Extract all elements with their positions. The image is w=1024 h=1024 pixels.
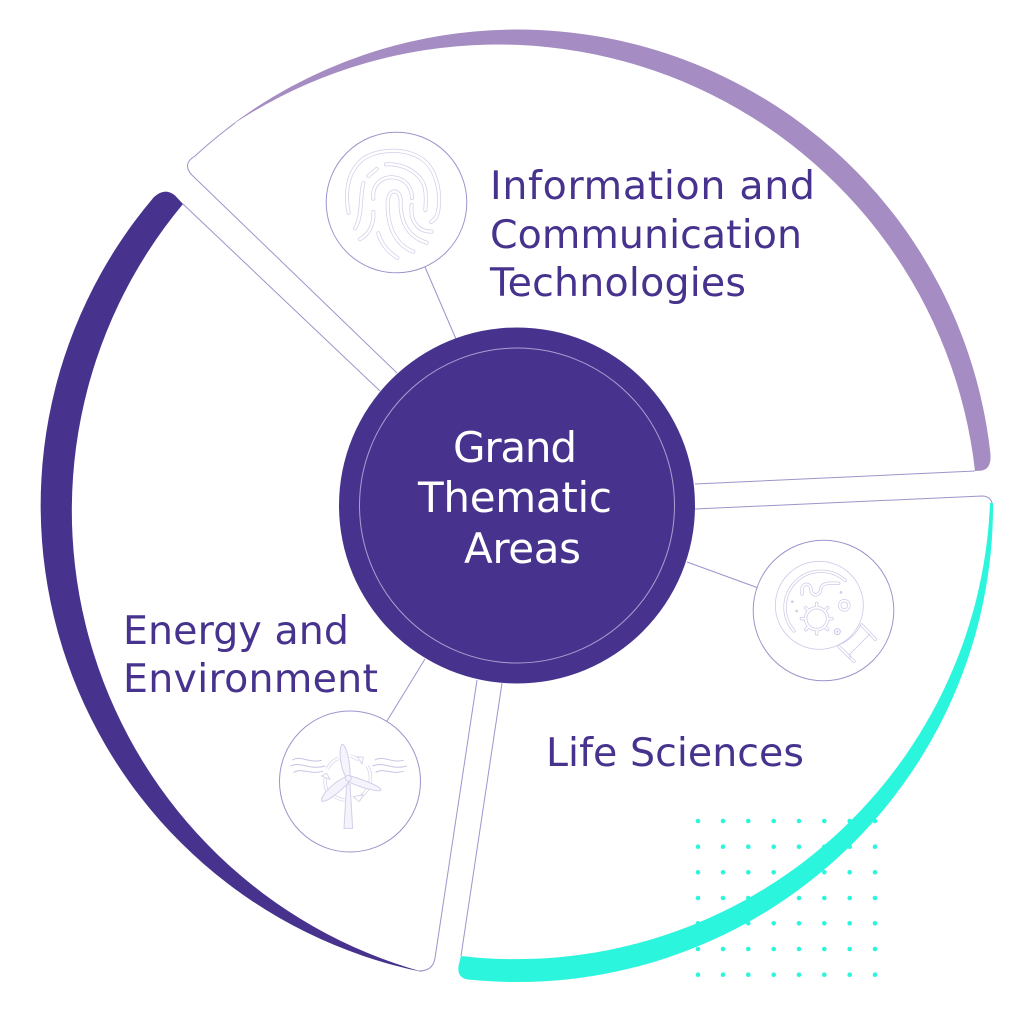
hub title: Grand — [453, 423, 577, 472]
accent arc: light purple — [226, 29, 991, 471]
panel outline: ICT — [188, 123, 975, 484]
panel outline: energy and environment — [183, 204, 477, 971]
label: information and communication technologies: Technologies — [489, 260, 746, 306]
panel: information and communication technologies — [188, 29, 991, 484]
panel: life sciences — [458, 496, 993, 982]
icon: wind turbine — [280, 711, 420, 852]
central hub: grand thematic areas — [339, 328, 695, 684]
label: energy and environment: Energy and — [123, 608, 349, 654]
hub title: Thematic — [417, 473, 612, 522]
connector: life sciences icon to hub — [687, 562, 757, 588]
icon: microbes in petri dish — [753, 540, 894, 681]
hub title: Areas — [464, 524, 581, 573]
accent arc: dark purple — [41, 192, 423, 972]
label: energy and environment: Environment — [123, 656, 378, 702]
label: life sciences: Life Sciences — [546, 730, 804, 776]
label: information and communication technologies: Communication — [490, 212, 802, 258]
connector: ICT icon to hub — [425, 267, 456, 339]
icon: fingerprint — [326, 132, 467, 273]
panel: energy and environment — [41, 192, 477, 972]
accent arc: teal — [458, 503, 993, 982]
label: information and communication technologies: Information and — [490, 163, 815, 209]
dot grid — [696, 819, 877, 977]
panel outline: life sciences — [461, 496, 992, 956]
connector: energy icon to hub — [387, 659, 425, 721]
